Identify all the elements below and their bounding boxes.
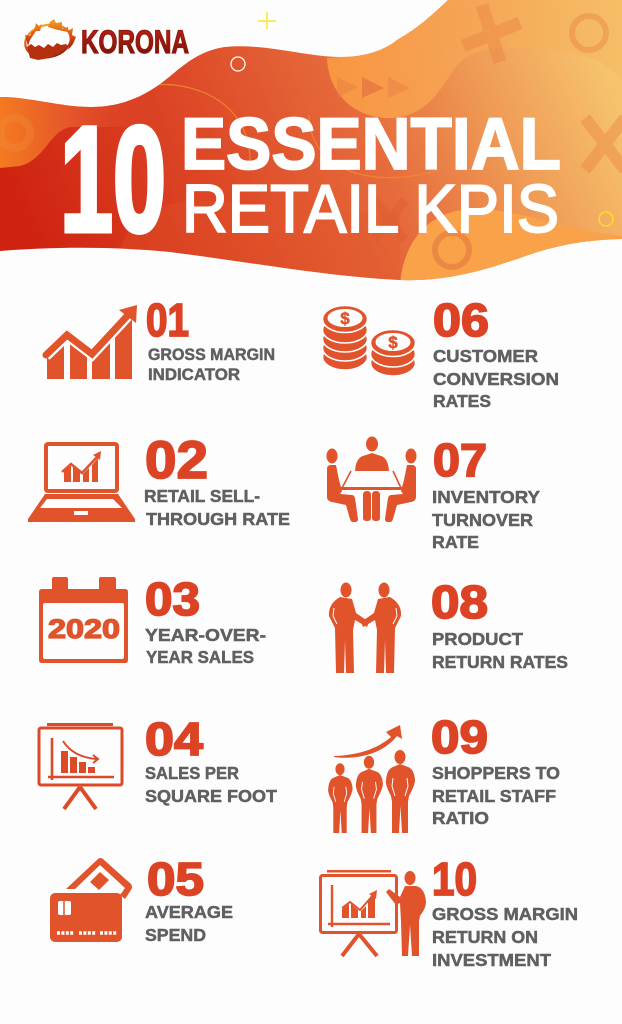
label: SHOPPERS TO (432, 763, 560, 783)
number: 05 (147, 853, 204, 905)
kpi 09 (328, 711, 560, 833)
label: AVERAGE (145, 902, 233, 922)
title number: 10 (60, 95, 166, 263)
kpi 07 (326, 434, 540, 552)
label: THROUGH RATE (146, 509, 290, 529)
icon: coin stacks: $ (388, 333, 398, 352)
label: SPEND (145, 925, 206, 945)
icon: flame ring (22, 19, 76, 61)
kpi 10 (320, 853, 578, 970)
icon: coin stacks (322, 306, 416, 376)
icon: calendar (39, 577, 128, 663)
kpi 02 (28, 431, 290, 529)
label: INDICATOR (148, 366, 240, 384)
icon: presentation board falling chart (39, 723, 122, 809)
icon: handshake (329, 582, 401, 673)
kpi 08 (329, 576, 568, 673)
icon: meeting table (326, 436, 416, 522)
number: 04 (145, 713, 203, 765)
decorative shapes (0, 5, 622, 267)
label: RATES (433, 391, 491, 411)
label: TURNOVER (432, 510, 533, 530)
label: RETAIL STAFF (432, 786, 556, 806)
number: 01 (146, 294, 189, 346)
label: CONVERSION (433, 369, 559, 389)
icon: white circle (231, 57, 245, 71)
icon: yellow plus (258, 12, 276, 29)
kpi 06 (322, 294, 559, 411)
number: 02 (145, 431, 208, 490)
label: INVENTORY (432, 487, 540, 507)
title line 2: RETAIL KPIS (182, 171, 559, 247)
icon: calendar: 2020 (48, 614, 120, 644)
icon: coin stacks: $ (340, 309, 350, 328)
brand name: KORONA (81, 24, 189, 60)
number: 10 (432, 853, 477, 905)
icon: arrow over team (328, 725, 415, 833)
label: RETAIL SELL- (144, 486, 260, 506)
icon: rising bars (45, 305, 137, 379)
title line 1: ESSENTIAL (181, 104, 561, 185)
icon: credit cards (50, 858, 132, 942)
icon: laptop (28, 444, 135, 522)
icon: presenter with board (320, 870, 426, 956)
label: SALES PER (145, 763, 239, 783)
label: GROSS MARGIN (432, 904, 578, 924)
number: 07 (433, 434, 487, 486)
label: PRODUCT (432, 629, 523, 649)
number: 08 (431, 576, 488, 628)
kpi 03 (39, 573, 266, 667)
title (60, 95, 561, 263)
number: 09 (431, 711, 488, 763)
logo (22, 19, 189, 61)
label: INVESTMENT (432, 950, 551, 970)
kpi 01 (45, 294, 275, 384)
icon: yellow circle (599, 212, 613, 226)
label: CUSTOMER (433, 346, 538, 366)
number: 06 (433, 294, 489, 346)
label: RATIO (432, 808, 489, 828)
label: RETURN ON (432, 927, 538, 947)
kpi 05 (50, 853, 233, 945)
label: RATE (432, 532, 479, 552)
label: YEAR SALES (146, 647, 254, 667)
kpi 04 (39, 713, 277, 809)
number: 03 (145, 573, 200, 625)
label: RETURN RATES (432, 652, 568, 672)
header banner (0, 0, 622, 290)
label: GROSS MARGIN (148, 346, 275, 364)
label: SQUARE FOOT (145, 786, 277, 806)
label: YEAR-OVER- (145, 625, 266, 645)
